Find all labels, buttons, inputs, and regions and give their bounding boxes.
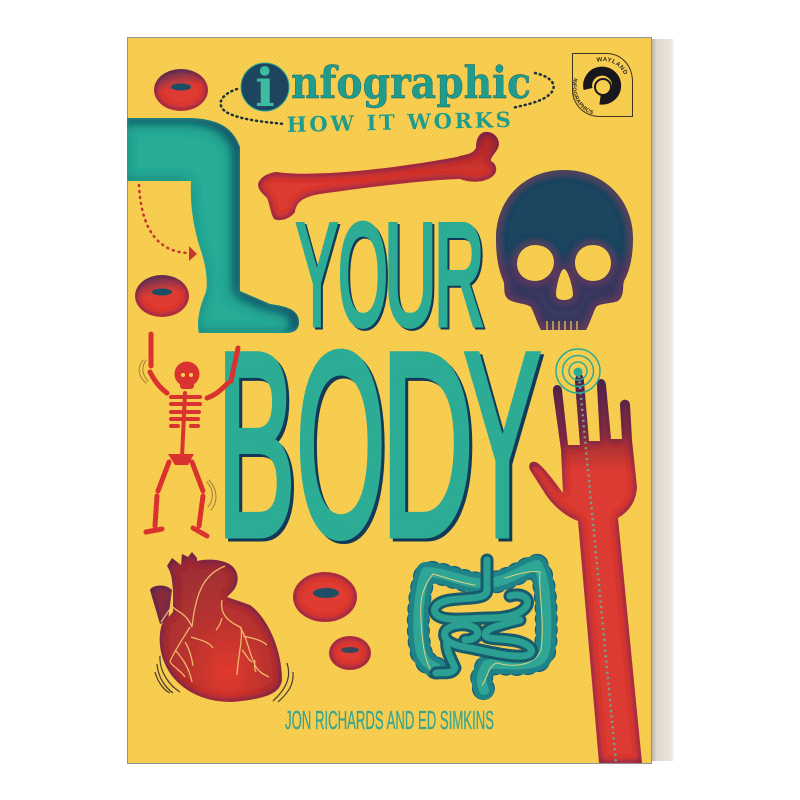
logo: Wayland Infographics [572, 53, 633, 117]
dotted ellipse around the title [221, 73, 554, 124]
skull of skeleton [174, 362, 200, 389]
main title: BODY: O [296, 298, 386, 591]
spine and ribs [171, 393, 200, 457]
touch rings [556, 349, 600, 393]
main title: YOUR: O [338, 193, 388, 356]
leg illustration [127, 118, 299, 333]
page edges of the book [651, 39, 674, 761]
main title: BODY [217, 298, 544, 595]
dotted red arrow [139, 185, 197, 261]
arms [150, 334, 238, 398]
dotted nerve line [579, 376, 616, 763]
main title: BODY: Y [467, 301, 544, 594]
main title: BODY: D [384, 301, 477, 594]
main title: YOUR: R [436, 196, 487, 359]
heart motion lines [155, 656, 293, 702]
large intestine [418, 565, 546, 690]
main title: BODY: D [381, 298, 474, 591]
skull illustration [496, 170, 633, 330]
main title: YOUR: U [386, 197, 439, 359]
icon: i badge [241, 58, 289, 119]
book cover background [128, 38, 652, 764]
legs [155, 462, 203, 526]
main title: YOUR: O [340, 195, 390, 358]
main title: YOUR: Y [298, 194, 340, 358]
main title: BODY: Y [464, 298, 541, 591]
feet [146, 528, 207, 536]
authors: JON RICHARDS AND ED SIMKINS [285, 705, 494, 735]
main title: YOUR [296, 192, 487, 359]
skeleton illustration [139, 334, 238, 536]
pelvis [168, 454, 194, 465]
bone illustration [258, 132, 499, 220]
series title [221, 58, 554, 137]
main title: YOUR: Y [296, 192, 338, 356]
blood cell top left [154, 69, 208, 111]
logo: Wayland Infographics: WAYLAND [596, 56, 628, 74]
logo: Wayland Infographics: INFOGRAPHICS [572, 78, 594, 114]
small intestine [435, 560, 532, 673]
heart illustration [150, 552, 293, 702]
hand and arm illustration [529, 349, 642, 763]
main title: YOUR: U [384, 195, 437, 357]
intestines illustration [418, 560, 546, 690]
motion lines [139, 360, 216, 510]
main title: BODY: O [299, 301, 389, 594]
main title: YOUR: R [434, 194, 485, 357]
icon: i badge: i [255, 58, 275, 119]
blood cell centre large [293, 572, 357, 622]
subheading: How it works: HOW IT WORKS [287, 107, 511, 137]
blood cell centre small [329, 636, 371, 670]
blood cell left [135, 275, 189, 317]
main title: BODY: B [217, 299, 296, 592]
heart vessels [161, 566, 269, 682]
heading: Infographic: nfographic [291, 58, 531, 109]
main title: BODY: B [220, 302, 299, 595]
skull teeth [547, 321, 577, 330]
